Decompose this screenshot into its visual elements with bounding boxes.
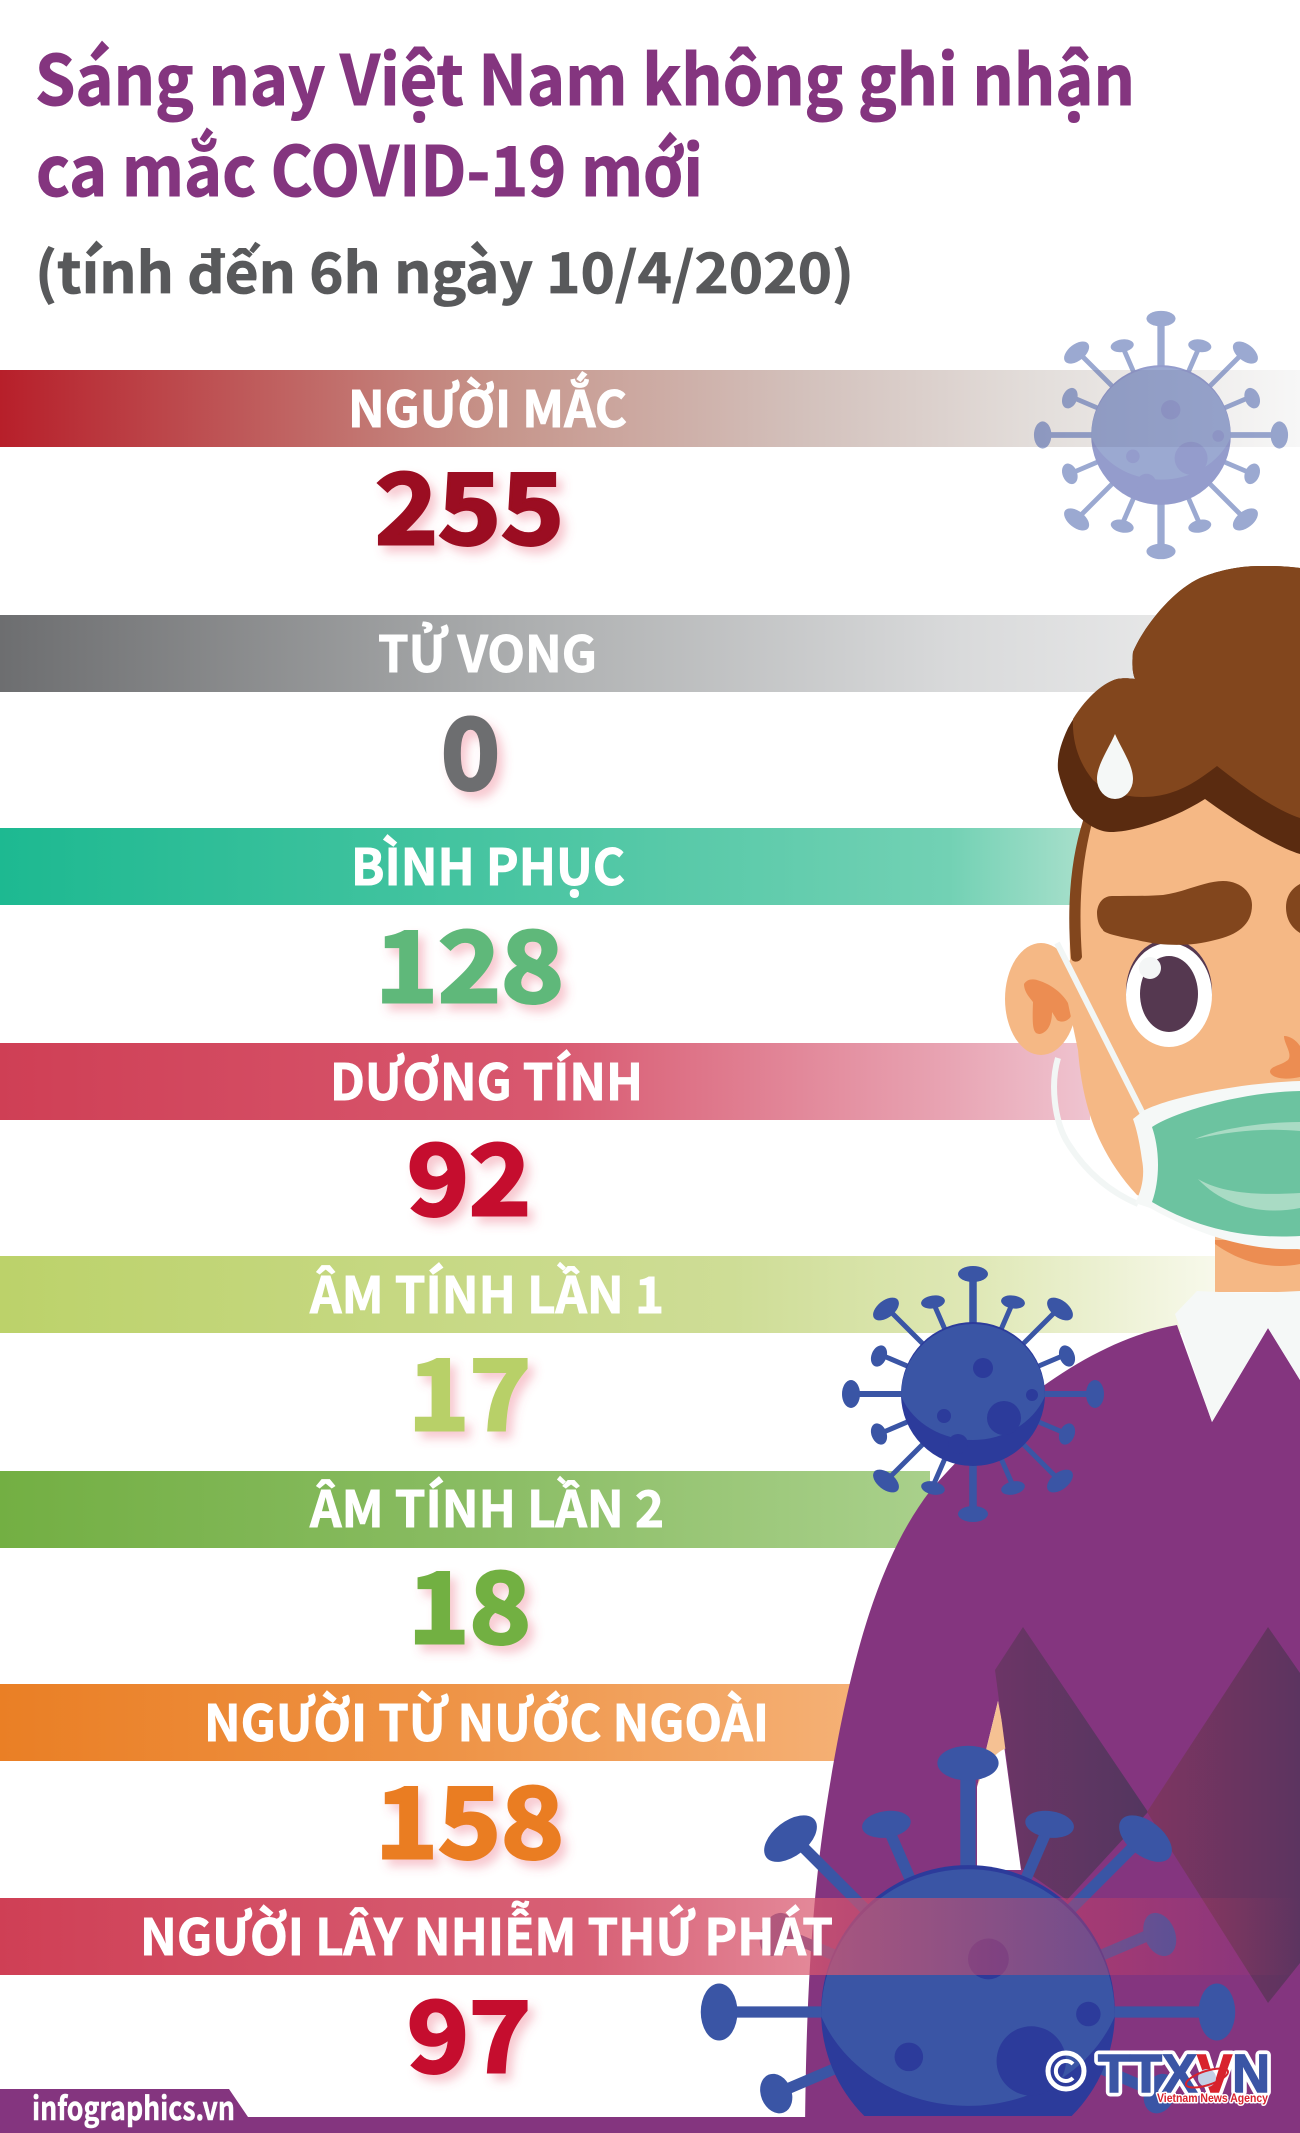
panel: bình phục xyxy=(0,828,1090,1031)
panel: âm tính lần 2: ÂM TÍNH LẦN 2 xyxy=(309,1470,664,1542)
panel: bình phục: 128 xyxy=(375,889,564,1031)
illustration: man wearing a mask xyxy=(805,566,1300,2133)
arm gap xyxy=(977,1701,1021,1870)
eyebrows xyxy=(1097,881,1252,945)
panel: người từ nước ngoài: 158 xyxy=(375,1745,564,1887)
face xyxy=(1062,780,1300,1250)
icon: large virus xyxy=(701,1746,1235,2118)
panel: người lây nhiễm thứ phát: NGƯỜI LÂY NHIỄM THỨ PHÁT xyxy=(140,1898,833,1970)
panel: người lây nhiễm thứ phát: 97 xyxy=(407,1959,531,2101)
logo: TTXVN: TTXVN xyxy=(1098,2044,1270,2104)
sideburn xyxy=(1069,812,1094,962)
logo: TTXVN: TTXVN xyxy=(1098,2044,1270,2104)
title xyxy=(35,25,1135,216)
subtitle: (tính đến 6h ngày 10/4/2020) xyxy=(35,229,854,310)
panel: âm tính lần 1: ÂM TÍNH LẦN 1 xyxy=(309,1256,664,1328)
sweat drop xyxy=(1097,734,1133,799)
panel: người từ nước ngoài: NGƯỜI TỪ NƯỚC NGOÀI xyxy=(204,1684,769,1756)
panel: người lây nhiễm thứ phát xyxy=(0,1898,1300,2101)
panel: âm tính lần 1 xyxy=(0,1256,1220,1459)
mask lower loop xyxy=(1054,1058,1138,1204)
panel: tử vong xyxy=(0,615,1200,818)
hair xyxy=(1058,566,1300,854)
icon: middle virus xyxy=(842,1266,1104,1522)
title: Sáng nay Việt Nam không ghi nhận xyxy=(35,25,1135,125)
panel: âm tính lần 1: 17 xyxy=(408,1317,531,1459)
panel: người từ nước ngoài xyxy=(0,1684,860,1887)
icon: pale virus xyxy=(1034,311,1288,559)
panel: dương tính xyxy=(0,1043,1090,1244)
footer bar with site name: infographics.vn xyxy=(32,2084,235,2130)
eye xyxy=(1126,939,1212,1047)
neck xyxy=(1215,1235,1300,1292)
panel: dương tính: DƯƠNG TÍNH xyxy=(330,1043,643,1115)
nose xyxy=(1270,1036,1300,1079)
panel: âm tính lần 2: 18 xyxy=(408,1530,531,1672)
title: ca mắc COVID-19 mới xyxy=(36,116,703,216)
panel: tử vong: TỬ VONG xyxy=(378,615,597,687)
surgical mask xyxy=(1133,1081,1300,1249)
sweater xyxy=(805,1325,1300,2133)
panel: âm tính lần 2 xyxy=(0,1470,930,1672)
mask strap xyxy=(1057,943,1143,1114)
footer bar with site name xyxy=(0,2084,1300,2133)
ear xyxy=(1005,943,1077,1055)
panel: dương tính: 92 xyxy=(407,1102,531,1244)
panel: người mắc: 255 xyxy=(375,431,564,573)
panel: người mắc: NGƯỜI MẮC xyxy=(348,370,627,442)
logo: TTXVN: Vietnam News Agency xyxy=(1157,2093,1269,2105)
panel: tử vong: 0 xyxy=(441,676,500,818)
panel: người mắc xyxy=(0,370,1300,573)
panel: bình phục: BÌNH PHỤC xyxy=(351,828,625,900)
sweater shading xyxy=(995,1627,1148,1900)
collar xyxy=(1175,1291,1300,1422)
